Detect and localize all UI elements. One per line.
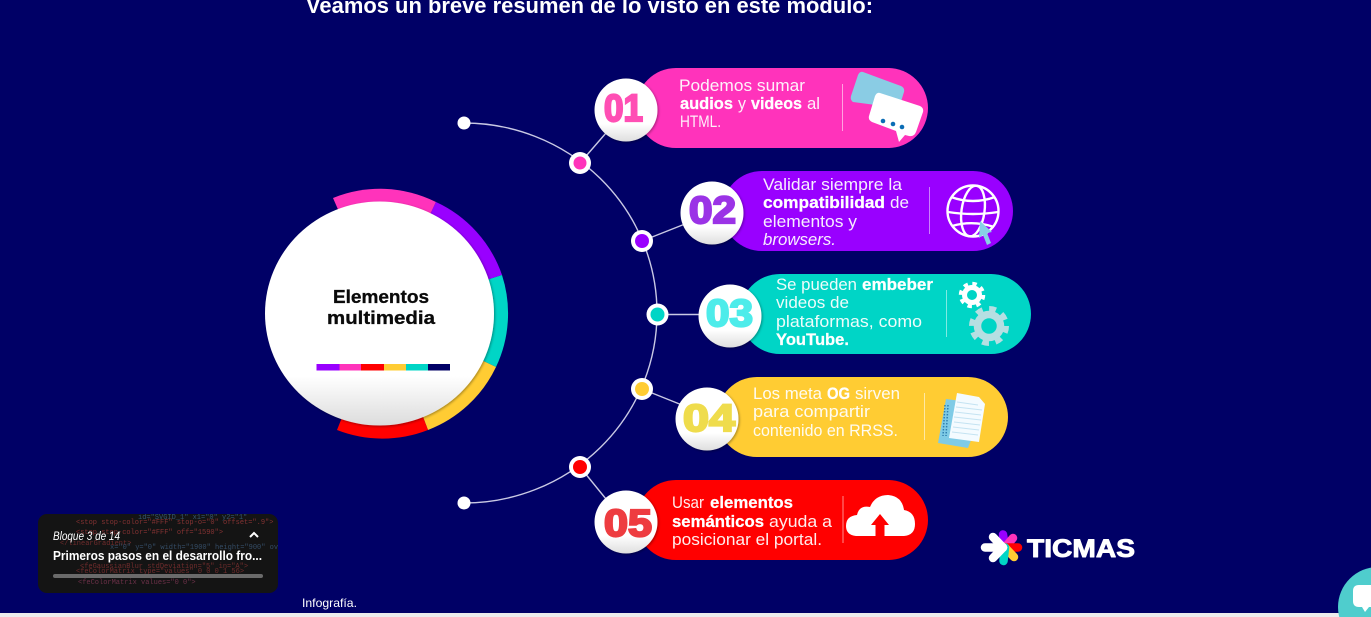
- text 03: Se pueden: [776, 276, 857, 294]
- panel 04: 04: [683, 398, 735, 440]
- text 03: embeber: [862, 276, 934, 294]
- decorative code background: <feGaussianBlur stdDeviation="5" in="A">: [80, 563, 248, 571]
- text 01: audios: [680, 95, 733, 113]
- text 04: para compartir: [753, 403, 871, 421]
- decorative code background: <feColorMatrix type="values" 0 0 0 1 56>: [76, 568, 244, 576]
- panel 03: [698, 274, 1031, 354]
- text 01: videos: [751, 95, 802, 113]
- chat widget: [1338, 567, 1371, 617]
- icon: globe with cursor: [948, 184, 998, 245]
- text 03: videos de: [776, 294, 849, 312]
- panel 04: [676, 377, 1008, 457]
- text 03: plataformas, como: [776, 313, 922, 331]
- panel 01: [594, 68, 928, 148]
- text 04: contenido en RRSS.: [753, 422, 898, 440]
- decorative code background: id="SVGID_1" x1="0" y2="1": [138, 514, 247, 522]
- decorative code background: <feColorMatrix values="0 0">: [78, 579, 196, 587]
- text 05: elementos: [710, 494, 793, 512]
- panel 05: 05: [604, 503, 652, 545]
- decorative code background: </linearGradient>: [60, 540, 131, 548]
- central heading: [327, 287, 436, 328]
- text 02: browsers.: [763, 231, 836, 249]
- progress bar: [53, 574, 263, 578]
- central heading: Elementos: [333, 287, 429, 307]
- colour bar: [316, 364, 450, 370]
- text 05: semánticos: [672, 513, 764, 531]
- text 04: Los meta: [753, 385, 823, 403]
- card title: Primeros pasos en el desarrollo fro...: [53, 548, 262, 563]
- logo: TICMAS: [985, 534, 1135, 563]
- text 02: elementos y: [763, 213, 858, 231]
- text 05: [672, 494, 833, 549]
- icon: chat bubbles: [851, 72, 923, 142]
- text 03: YouTube.: [776, 331, 849, 349]
- decorative code background: <stop stop-color="#FFF" off="1590">: [76, 529, 223, 537]
- panel 01: 01: [604, 88, 643, 130]
- panel 02: 02: [689, 190, 736, 232]
- decorative code background: [60, 514, 278, 584]
- text 02: [763, 176, 909, 249]
- text 02: de: [890, 194, 909, 212]
- text 04: [753, 385, 900, 440]
- panel 02: [680, 171, 1013, 251]
- timeline arc with nodes: [458, 116, 700, 510]
- text 05: Usar: [672, 494, 704, 512]
- decorative code background: x="0" y="0" width="1900" height="900" overlay: [110, 544, 299, 552]
- text 01: al: [807, 95, 820, 113]
- icon: documents: [938, 393, 985, 448]
- progress card: Bloque 3 de 14: [38, 514, 299, 593]
- caption: Infografía.: [302, 596, 357, 610]
- text 05: ayuda a: [769, 513, 833, 531]
- text 01: [679, 77, 820, 131]
- panel 05: [594, 480, 928, 560]
- text 01: Podemos sumar: [679, 77, 806, 95]
- text 04: OG: [827, 385, 850, 403]
- card label: Bloque 3 de 14: [53, 531, 120, 543]
- coloured ring segments: [333, 189, 508, 439]
- text 02: Validar siempre la: [763, 176, 903, 194]
- text 03: [776, 276, 934, 349]
- icon: chevron up: [250, 533, 258, 537]
- text 01: HTML.: [680, 113, 721, 131]
- panel 03: 03: [706, 293, 753, 335]
- text 05: posicionar el portal.: [672, 531, 822, 549]
- decorative code background: <stop stop-color="#FFF" stop-o="0" offset=".9">: [76, 519, 273, 527]
- logo: TICMAS: TICMAS: [1027, 535, 1135, 563]
- icon: cloud upload: [846, 495, 915, 537]
- icon: gears: [960, 284, 1006, 344]
- text 04: sirven: [855, 385, 900, 403]
- central circle: Elementos multimedia: [265, 189, 508, 439]
- central heading: multimedia: [327, 308, 436, 328]
- text 02: compatibilidad: [763, 194, 885, 212]
- text 01: y: [738, 95, 747, 113]
